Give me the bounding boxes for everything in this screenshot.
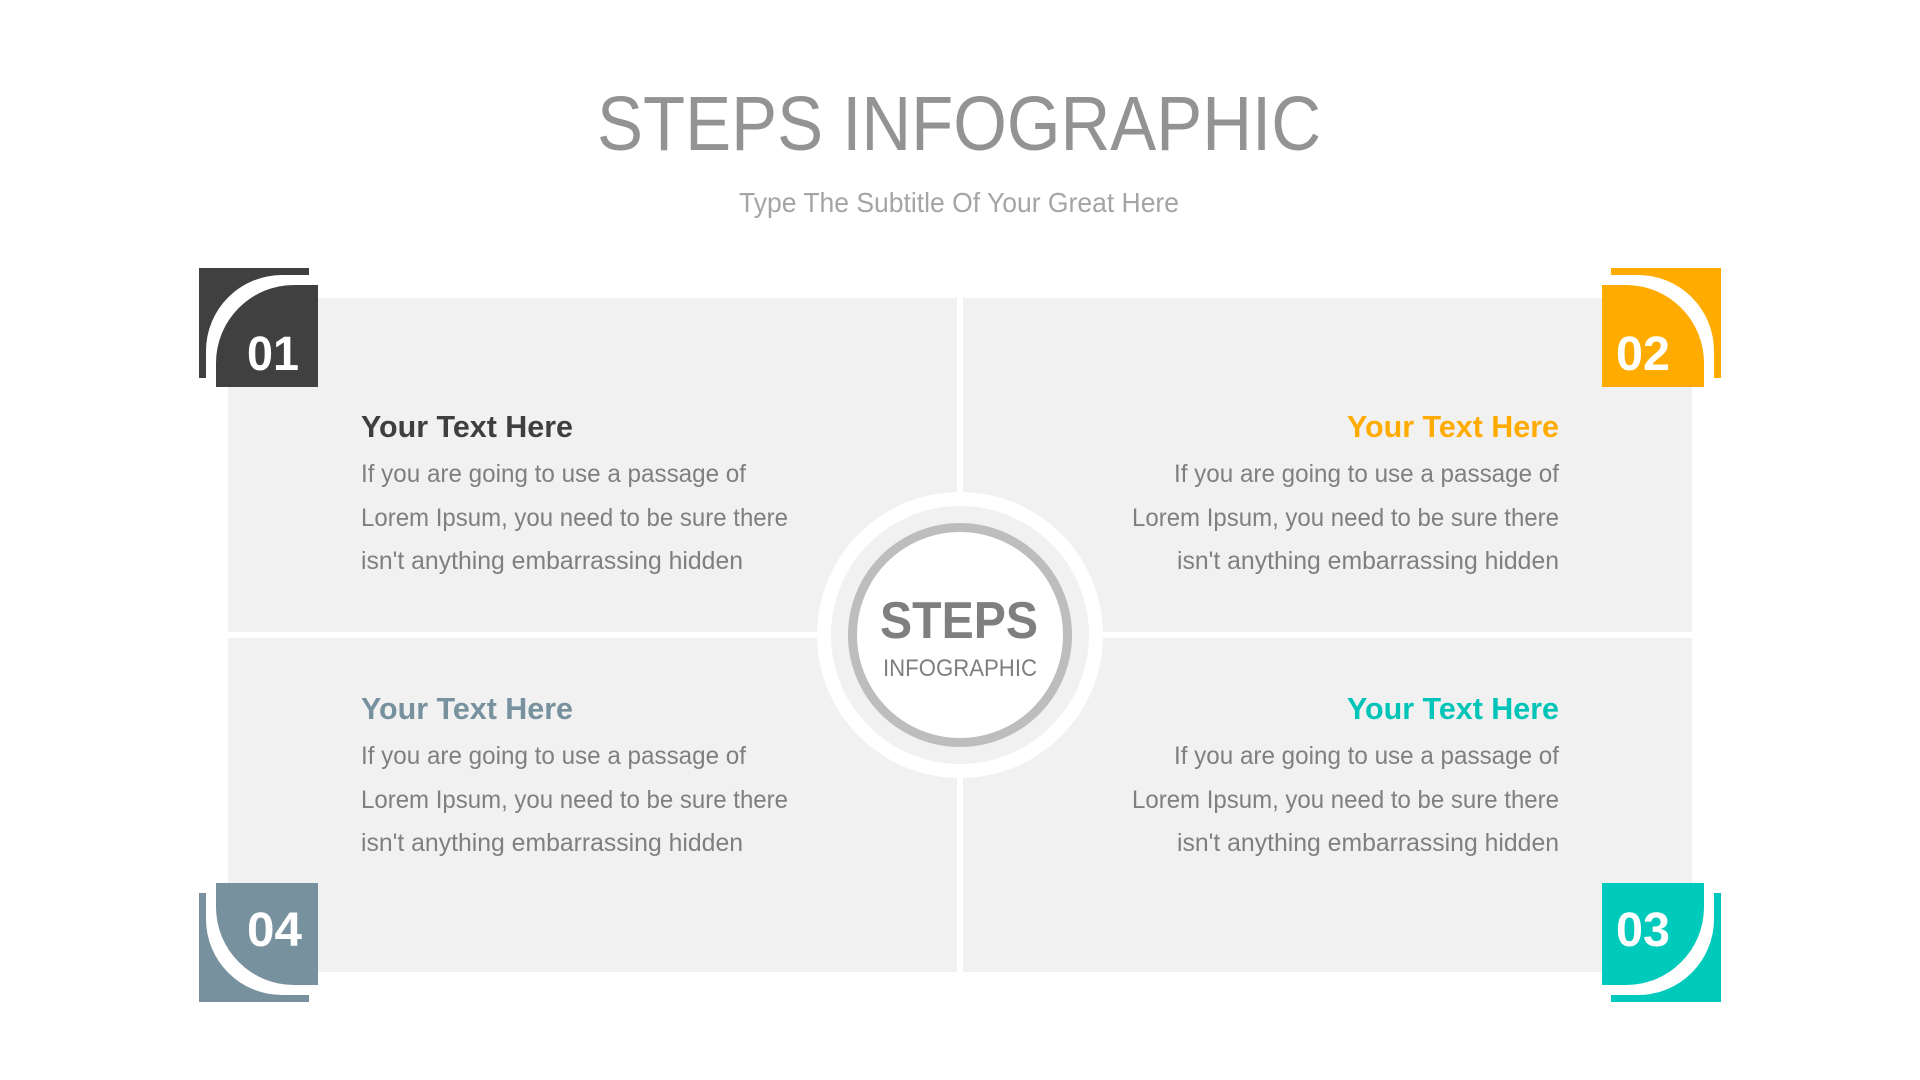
center label: STEPS: STEPS — [880, 592, 1038, 650]
number: 01: 01 — [247, 328, 299, 381]
body text: step 1: isn't anything embarrassing hidden — [361, 547, 743, 575]
header — [597, 81, 1321, 218]
body text: step 3: If you are going to use a passage of — [1174, 742, 1559, 770]
heading: step 1: Your Text Here — [361, 409, 573, 444]
panel: step 2 — [963, 298, 1692, 632]
body text: step 3: Lorem Ipsum, you need to be sure there — [1132, 786, 1559, 814]
subtitle: Type The Subtitle Of Your Great Here — [739, 187, 1179, 218]
title: STEPS INFOGRAPHIC — [597, 81, 1321, 167]
badge: 04 — [199, 883, 318, 1002]
heading: step 2: Your Text Here — [1347, 409, 1559, 444]
number: 04: 04 — [247, 904, 302, 957]
center label: INFOGRAPHIC: INFOGRAPHIC — [883, 655, 1037, 682]
body text: step 4 — [361, 742, 788, 857]
panel: step 1 — [228, 298, 957, 632]
body text: step 2 — [1132, 460, 1559, 575]
badge: 01 — [199, 268, 318, 387]
body text: step 1: If you are going to use a passage of — [361, 460, 746, 488]
heading: step 4: Your Text Here — [361, 691, 573, 726]
number: 02: 02 — [1616, 328, 1670, 381]
body text: step 3: isn't anything embarrassing hidden — [1177, 829, 1559, 857]
heading: step 3: Your Text Here — [1347, 691, 1559, 726]
body text: step 2: Lorem Ipsum, you need to be sure there — [1132, 504, 1559, 532]
panel: step 4 — [228, 638, 957, 972]
body text: step 4: If you are going to use a passage of — [361, 742, 746, 770]
badge: 03 — [1602, 883, 1721, 1002]
body text: step 1 — [361, 460, 788, 575]
body text: step 2: isn't anything embarrassing hidden — [1177, 547, 1559, 575]
body text: step 2: If you are going to use a passage of — [1174, 460, 1559, 488]
panel: step 3 — [963, 638, 1692, 972]
body text: step 4: isn't anything embarrassing hidden — [361, 829, 743, 857]
badge: 02 — [1602, 268, 1721, 387]
center circle — [817, 492, 1103, 778]
body text: step 3 — [1132, 742, 1559, 857]
body text: step 1: Lorem Ipsum, you need to be sure there — [361, 504, 788, 532]
number: 03: 03 — [1616, 904, 1670, 957]
body text: step 4: Lorem Ipsum, you need to be sure there — [361, 786, 788, 814]
